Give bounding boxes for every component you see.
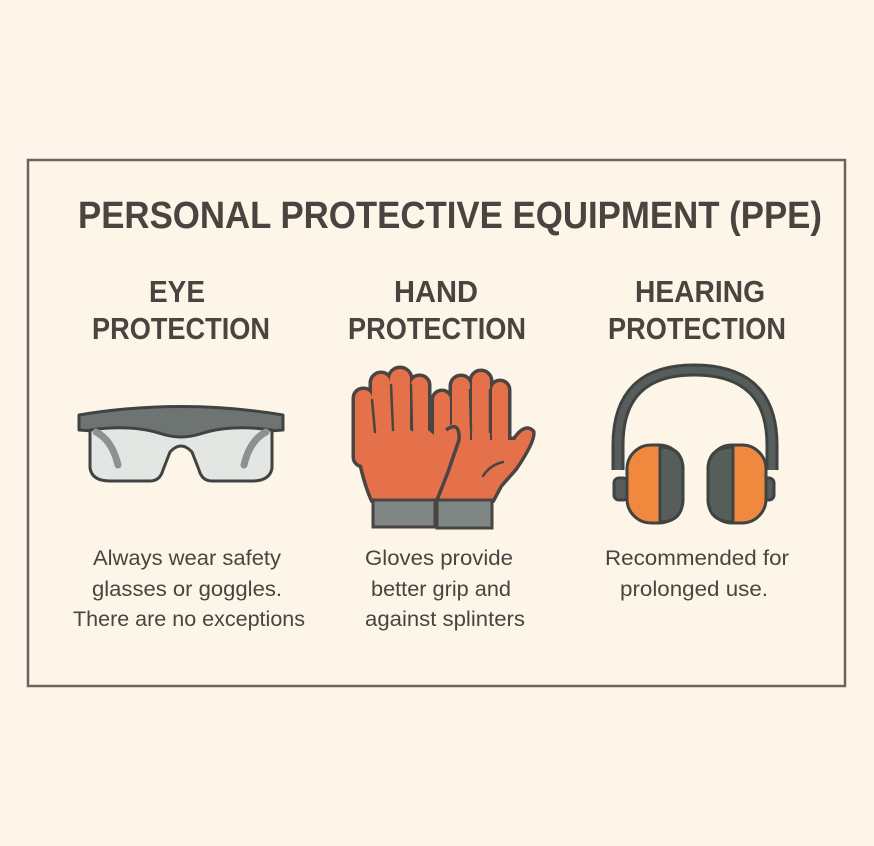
text: hand protection description: better grip and: [371, 578, 511, 601]
heading: hand protection: [348, 274, 526, 346]
text: eye protection description: Always wear safety: [93, 547, 282, 570]
text: eye protection description: [73, 547, 305, 631]
heading: eye protection: EYE: [149, 274, 205, 309]
text: eye protection description: There are no exceptions: [73, 608, 305, 631]
text: hearing protection description: prolonged use.: [620, 578, 768, 601]
text: hand protection description: against splinters: [365, 608, 525, 631]
heading: eye protection: [92, 274, 270, 346]
icon: safety glasses: [79, 406, 283, 481]
text: hand protection description: Gloves provide: [365, 547, 513, 570]
heading: hand protection: HAND: [394, 274, 478, 309]
title: PERSONAL PROTECTIVE EQUIPMENT (PPE): [78, 195, 822, 237]
heading: hearing protection: [608, 274, 786, 346]
icon: earmuffs: [614, 370, 774, 523]
text: hearing protection description: [605, 547, 789, 601]
heading: hearing protection: PROTECTION: [608, 311, 786, 346]
text: hand protection description: [365, 547, 525, 631]
heading: hearing protection: HEARING: [635, 274, 765, 309]
text: eye protection description: glasses or goggles.: [92, 578, 282, 601]
heading: eye protection: PROTECTION: [92, 311, 270, 346]
glove cuffs: [373, 500, 492, 528]
text: hearing protection description: Recommended for: [605, 547, 789, 570]
icon: gloves: [355, 369, 532, 528]
panel: main frame: [28, 160, 845, 686]
heading: hand protection: PROTECTION: [348, 311, 526, 346]
